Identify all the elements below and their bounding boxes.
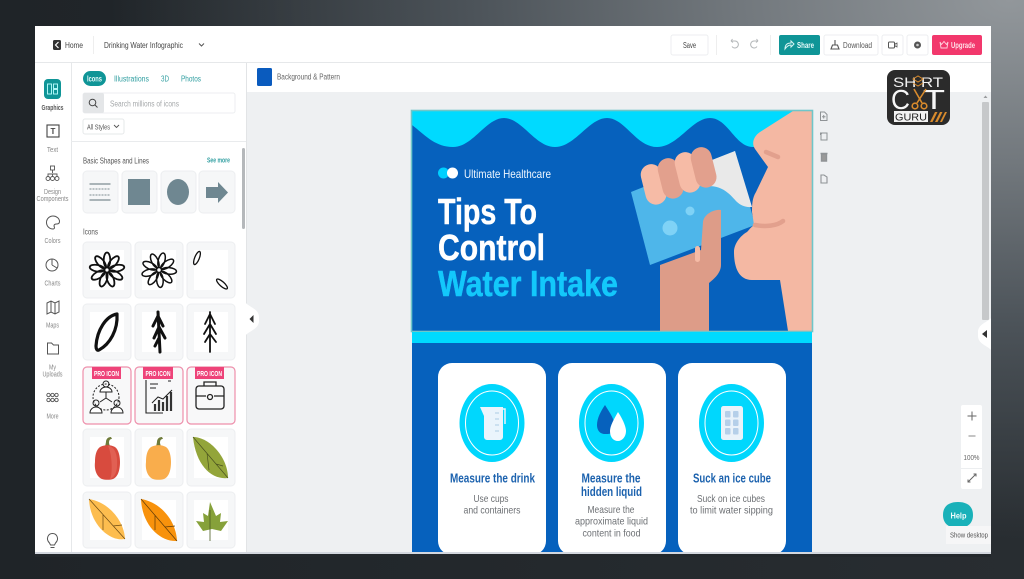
icon: two small leaves [192, 251, 229, 290]
left rail: Maps [46, 301, 59, 330]
right collapse tab [978, 318, 991, 350]
card: suck an ice cube: Suck an ice cube [693, 472, 771, 486]
toolbar: background and pattern [257, 68, 340, 86]
title: Tips To [438, 191, 537, 232]
left rail: lightbulb [47, 534, 58, 548]
panel tabs: 3D [161, 74, 169, 84]
left rail: Design Components [36, 166, 69, 203]
top bar: action buttons [671, 35, 982, 55]
left rail: Design Components: Components [36, 196, 69, 203]
icon: green leaf [193, 437, 228, 478]
watermark logo: C [891, 84, 910, 115]
heading: basic shapes and lines [83, 156, 230, 166]
style filter: All Styles [87, 122, 110, 132]
heading: icons: Icons [83, 228, 98, 236]
pro icon: network: PRO ICON [94, 371, 119, 378]
left rail: Colors [44, 216, 61, 245]
icon: scissors [912, 89, 927, 109]
top bar: home and document title: Drinking Water Infographic [104, 41, 183, 50]
icon: brush branch 1 [153, 312, 165, 352]
watermark logo: T [923, 84, 945, 115]
left rail: Graphics [42, 79, 64, 112]
icon: brush branch 2 [204, 312, 216, 352]
icon: orange pepper [146, 437, 171, 480]
card: suck an ice cube [678, 363, 786, 555]
top bar: home and document title [53, 36, 204, 54]
pro icon: network [83, 367, 131, 424]
top bar: action buttons: Share [797, 41, 814, 50]
card: measure the drink: and containers [464, 504, 520, 516]
help button: Help [950, 510, 966, 520]
icon: brush leaf [96, 314, 117, 350]
card: measure the drink [438, 363, 546, 555]
left rail: More: More [46, 414, 59, 420]
pro icon: report chart: PRO ICON [146, 371, 170, 378]
pro icon: report chart [135, 367, 183, 424]
wave band [412, 110, 800, 147]
brand mark: Ultimate Healthcare [464, 167, 551, 181]
icon: orange leaf [141, 499, 177, 541]
top bar: home and document title: Home [65, 41, 83, 50]
card: measure the drink: Measure the drink [450, 472, 535, 486]
heading: basic shapes and lines: Basic Shapes and Lines [83, 156, 149, 166]
watermark logo: SH RT [893, 74, 944, 90]
icon tiles [83, 242, 235, 548]
panel tabs: Photos [181, 74, 201, 84]
title [438, 191, 618, 304]
top bar: action buttons: Save [683, 41, 696, 50]
card: measure the drink: Use cups [474, 493, 508, 505]
panel tabs [83, 71, 201, 86]
left rail: Maps: Maps [46, 322, 59, 330]
left rail: Design Components: Design [44, 189, 61, 196]
infographic lower panel [412, 343, 812, 552]
title: Water Intake [438, 263, 618, 304]
zoom controls: 100% [964, 453, 980, 462]
brand mark [438, 167, 551, 181]
card: measure the hidden liquid: approximate liquid [575, 516, 648, 528]
pro icon: briefcase [187, 367, 235, 424]
page action icons [820, 112, 828, 183]
left rail: Text: T [51, 127, 56, 136]
illustration: face [734, 111, 812, 331]
icon: flower outline 1 [89, 252, 125, 288]
card: measure the hidden liquid: Measure the [588, 504, 635, 516]
basic shape tiles [83, 171, 235, 213]
card: measure the hidden liquid: Measure the [582, 472, 641, 486]
icon: water drops [597, 405, 626, 441]
search box: Search millions of icons [110, 100, 179, 108]
left rail: Colors: Colors [44, 238, 61, 245]
left rail: My Uploads: My [49, 364, 56, 372]
card: suck an ice cube: Suck on ice cubes [697, 493, 765, 505]
canvas scrollbar [981, 92, 991, 552]
infographic hero panel [411, 110, 813, 332]
show desktop tooltip: Show desktop [950, 530, 988, 540]
zoom controls [961, 405, 982, 489]
icon: flower outline 2 [141, 252, 177, 288]
left rail: My Uploads: Uploads [42, 372, 63, 378]
infographic cyan band [412, 332, 812, 343]
panel collapse tab [246, 303, 259, 335]
toolbar: background and pattern: Background & Pattern [277, 72, 340, 82]
left rail: Charts: Charts [44, 280, 61, 288]
top bar: action buttons: Download [843, 41, 872, 50]
left rail: More [46, 393, 59, 420]
icon: maple leaf [196, 502, 228, 541]
pro icon: briefcase: PRO ICON [197, 371, 222, 378]
watermark logo [887, 70, 950, 125]
left rail: Text [47, 125, 59, 154]
icon: ice cube tray [721, 406, 743, 440]
show desktop tooltip [946, 526, 991, 544]
style filter [83, 119, 124, 134]
icon: red pepper [95, 437, 120, 480]
search box [83, 93, 235, 113]
card: measure the hidden liquid: hidden liquid [581, 485, 642, 499]
card: measure the hidden liquid [558, 363, 666, 555]
panel scrollbar [242, 148, 245, 229]
icon: measuring jug [480, 407, 505, 440]
window bottom edge [35, 552, 991, 554]
top bar: action buttons: Upgrade [951, 41, 975, 50]
illustration: glass [631, 151, 755, 265]
watermark logo: GURU [895, 112, 927, 124]
title: Control [438, 227, 545, 268]
illustration: hand [638, 145, 721, 331]
heading: basic shapes and lines: See more [207, 158, 230, 164]
icon: yellow leaf [89, 499, 125, 539]
panel tabs: Illustrations [114, 74, 149, 84]
card: measure the hidden liquid: content in food [582, 528, 641, 540]
left rail: My Uploads [42, 343, 63, 378]
panel tabs: Icons [87, 74, 102, 84]
left rail: Graphics: Graphics [42, 105, 64, 112]
left rail: Charts [44, 259, 61, 288]
help button [943, 502, 973, 528]
left rail: Text: Text [47, 147, 58, 154]
card: suck an ice cube: to limit water sipping [690, 504, 773, 516]
